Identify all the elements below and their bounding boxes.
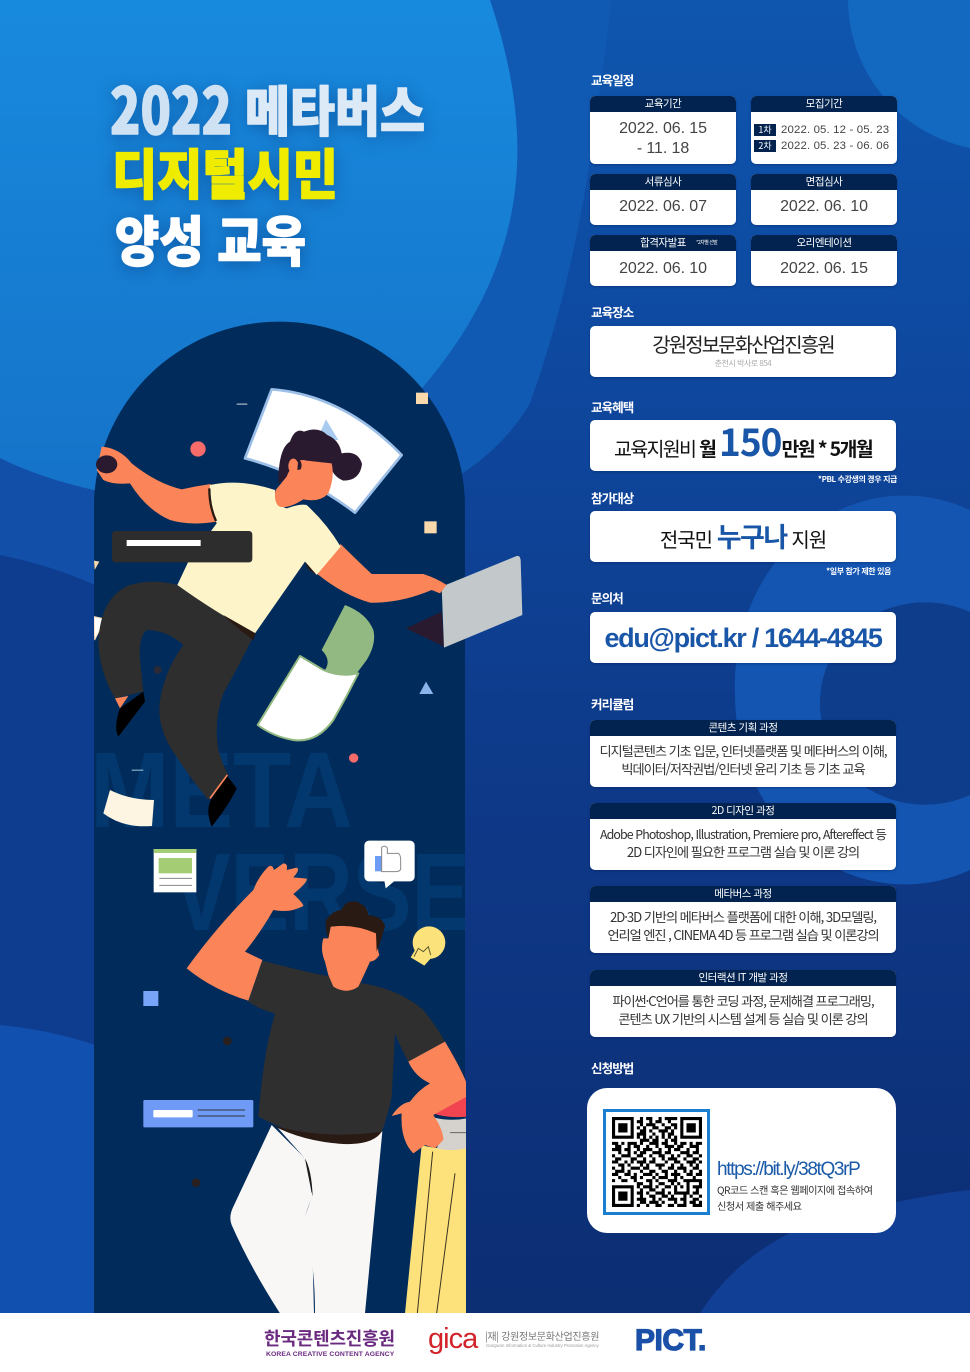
panel: 교육장소: 강원정보문화산업진흥원 [652, 329, 834, 358]
icon: light bulb [411, 926, 445, 966]
QR code [603, 1109, 710, 1215]
card: 면접심사: 2022. 06. 10 [780, 198, 868, 215]
card: 콘텐츠 기획 과정: 빅데이터/저작권법/인터넷 윤리 기초 등 기초 교육 [621, 759, 865, 778]
icon: floating green and white paper [258, 605, 374, 740]
card: 서류심사 [590, 174, 736, 225]
title line 2: 디지털시민 [112, 131, 338, 210]
instructions: 신청서 제출 해주세요 [717, 1198, 802, 1213]
card: 합격자발표 [590, 235, 736, 286]
card: 교육기간 [590, 96, 736, 164]
panel: 참가대상: 전국민 누구나 지원 [660, 516, 826, 555]
character: man leaning on pencil with icons [143, 841, 467, 1313]
card: 인터랙션 IT 개발 과정 [590, 970, 896, 1037]
title line 1: 메타버스 [245, 68, 425, 147]
heading: 문의처: 문의처 [591, 588, 623, 607]
card: 서류심사: 서류심사 [645, 174, 681, 189]
panel: 교육혜택 [590, 420, 896, 471]
heading: 교육혜택: 교육혜택 [591, 397, 633, 416]
decorative squares, dots and triangles [94, 393, 437, 826]
title [108, 61, 426, 277]
card: 콘텐츠 기획 과정: 디지털콘텐츠 기초 입문, 인터넷플랫폼 및 메타버스의 이해, [599, 741, 887, 760]
card: 모집기간: 2022. 05. 23 - 06. 06 [781, 140, 889, 152]
heading: 교육일정: 교육일정 [591, 70, 633, 89]
small decorative shapes [143, 991, 232, 1187]
card: 2D 디자인 과정 [590, 803, 896, 870]
panel: 문의처 [590, 612, 896, 663]
heading: 신청방법: 신청방법 [591, 1058, 633, 1077]
pencil [405, 1095, 467, 1313]
card: 서류심사: 2022. 06. 07 [619, 198, 707, 215]
character: floating woman with floating objects [94, 389, 522, 827]
panel: 교육장소 [590, 326, 896, 377]
watermark: META VERSE: VERSE [172, 831, 470, 954]
card: 메타버스 과정: 언리얼 엔진 , CINEMA 4D 등 프로그램 실습 및 이론강의 [607, 925, 879, 944]
card: 2D 디자인 과정: 2D 디자인 과정 [712, 803, 774, 818]
illustration: arch panel with two characters [94, 322, 522, 1313]
watermark: META VERSE: META [90, 729, 353, 850]
card: 오리엔테이션: 오리엔테이션 [797, 235, 851, 250]
note: 참가 제한: *일부 참가 제한 있음 [826, 566, 891, 577]
panel: 신청방법 [587, 1088, 896, 1233]
card: 인터랙션 IT 개발 과정: 인터랙션 IT 개발 과정 [699, 970, 787, 985]
card: 메타버스 과정: 메타버스 과정 [714, 886, 772, 901]
logo: gica: gica [428, 1323, 477, 1355]
card: 모집기간: 1차 [758, 123, 772, 136]
panel: 문의처: edu@pict.kr / 1644-4845 [604, 623, 882, 653]
panel: 교육장소: 춘천시 박사로 854 [715, 358, 771, 369]
panel: 교육혜택: 교육지원비 월 150만원 * 5개월 [614, 413, 872, 467]
card: 합격자발표: 합격자발표 [640, 235, 686, 250]
URL: https://bit.ly/38tQ3rP [717, 1159, 859, 1180]
card: 콘텐츠 기획 과정: 콘텐츠 기획 과정 [708, 720, 778, 735]
heading: 커리큘럼: 커리큘럼 [591, 694, 633, 713]
icon: pillow sheet [245, 389, 402, 513]
card: 2D 디자인 과정: Adobe Photoshop, Illustration, Premiere pro, Aftereffect 등 [600, 825, 886, 843]
card: 교육기간: 2022. 06. 15 [619, 120, 707, 137]
icon: laptop [406, 556, 522, 648]
card: 교육기간: 교육기간 [645, 96, 681, 111]
card: 메타버스 과정: 2D·3D 기반의 메타버스 플랫폼에 대한 이해, 3D모델링, [610, 907, 876, 926]
card: 교육기간: - 11. 18 [637, 140, 689, 157]
card: 오리엔테이션 [751, 235, 897, 286]
heading: 참가대상: 참가대상 [591, 488, 633, 507]
arch background [94, 322, 465, 1313]
card: 면접심사: 면접심사 [806, 174, 842, 189]
title line 1 [110, 61, 425, 153]
card: 2D 디자인 과정: 2D 디자인에 필요한 프로그램 실습 및 이론 강의 [627, 842, 859, 861]
note: PBL: *PBL 수강생의 경우 지급 [818, 474, 897, 485]
panel: 참가대상 [590, 511, 896, 562]
card: 모집기간: 2차 [758, 139, 772, 152]
title line 3: 양성 교육 [115, 198, 306, 277]
card: 모집기간 [751, 96, 897, 164]
man figure [187, 863, 467, 1313]
card: 인터랙션 IT 개발 과정: 콘텐츠 UX 기반의 시스템 설계 등 실습 및 이론 강의 [618, 1009, 868, 1028]
watermark: META VERSE [96, 752, 465, 931]
card: 합격자발표: *2차별 선발 [696, 239, 717, 246]
instructions [717, 1182, 873, 1213]
card: 오리엔테이션: 2022. 06. 15 [780, 260, 868, 277]
card: 모집기간: 2022. 05. 12 - 05. 23 [781, 124, 889, 136]
card: 콘텐츠 기획 과정 [590, 720, 896, 787]
footer [0, 1313, 970, 1372]
card: blue text bar [143, 1100, 253, 1127]
logo: gica: Gangwon Information & Culture Industry Promotion Agency [486, 1343, 599, 1348]
logo: 한국콘텐츠진흥원: 한국콘텐츠진흥원 [264, 1325, 395, 1351]
icon: thumbs up bubble [364, 841, 415, 888]
logo: gica [428, 1323, 599, 1355]
card: 메타버스 과정 [590, 886, 896, 953]
card: 인터랙션 IT 개발 과정: 파이썬·C언어를 통한 코딩 과정, 문제해결 프로그래밍, [612, 991, 874, 1010]
card: 합격자발표: 2022. 06. 10 [619, 260, 707, 277]
icon: document card [154, 849, 196, 892]
logo: PICT: PICT. [635, 1324, 706, 1357]
logo: 한국콘텐츠진흥원: KOREA CREATIVE CONTENT AGENCY [266, 1351, 394, 1358]
card: 모집기간: 모집기간 [806, 96, 842, 111]
title line 1: 2022 [110, 61, 232, 153]
woman figure [96, 429, 447, 827]
instructions: QR코드 스캔 혹은 웹페이지에 접속하여 [717, 1182, 873, 1197]
heading: 교육장소: 교육장소 [591, 302, 633, 321]
card: 면접심사 [751, 174, 897, 225]
logo: gica: |재| 강원정보문화산업진흥원 [485, 1328, 599, 1343]
